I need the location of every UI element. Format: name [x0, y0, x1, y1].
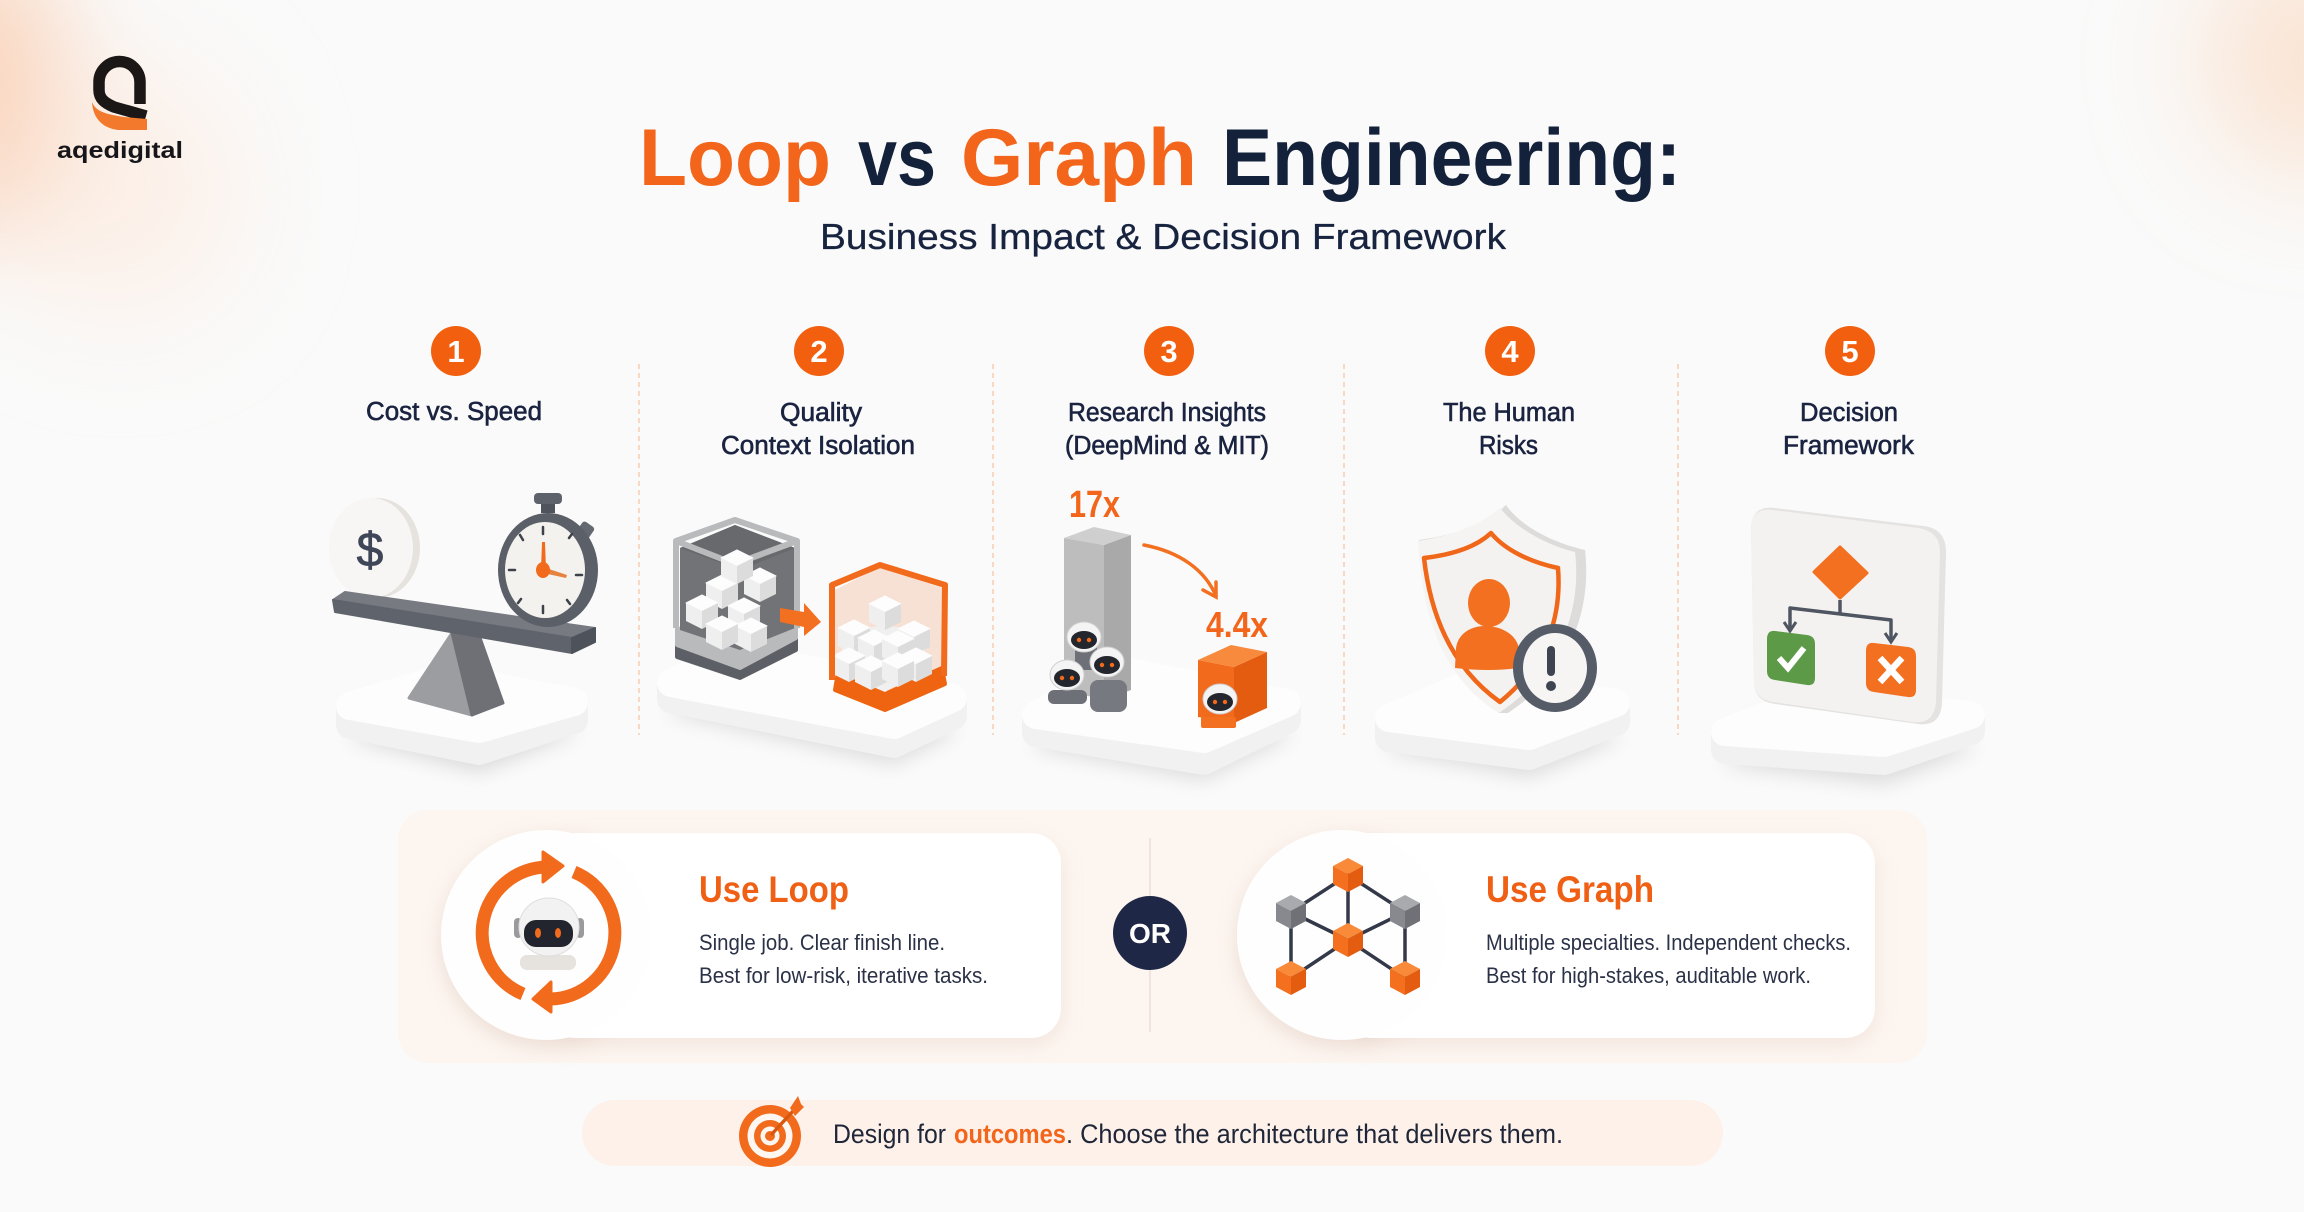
card: use loop: [441, 830, 1061, 1046]
text: loop details: Best for low-risk, iterative tasks.: [699, 963, 988, 988]
number badge 2: 2: [810, 334, 828, 369]
number badge 5: 5: [1841, 334, 1859, 369]
logo: [57, 61, 183, 163]
icon: decision flow panel: [1718, 508, 1980, 784]
curved arrow: [1144, 545, 1216, 597]
top-left corner glow: [0, 0, 240, 320]
title: [639, 113, 1681, 203]
card: use graph: [1237, 830, 1875, 1046]
icon: balance scale with coin and stopwatch: [329, 493, 598, 772]
text: graph details: Multiple specialties. Independent checks.: [1486, 930, 1851, 955]
closing statement: outcomes: [954, 1119, 1066, 1149]
column 5: decision framework: [1718, 326, 1980, 784]
heading: research insights: Research Insights: [1068, 399, 1266, 427]
icon: loop arrows with robot: [482, 852, 615, 1012]
heading: the human risks: Risks: [1479, 432, 1538, 460]
panel: loop or graph choice: [398, 810, 1927, 1063]
closing statement: . Choose the architecture that delivers them.: [1066, 1119, 1563, 1149]
column 1: cost vs speed: [329, 326, 598, 772]
text: graph details: [1486, 930, 1851, 988]
icon: target with arrow: [739, 1096, 804, 1167]
column 2: quality context isolation: [665, 326, 960, 764]
heading: quality context isolation: Quality: [780, 399, 862, 427]
number badge 2: [794, 326, 844, 376]
column 3: research insights: [1030, 326, 1295, 780]
heading: decision framework: [1783, 399, 1914, 460]
closing statement: Design for: [833, 1119, 946, 1149]
text: graph details: Best for high-stakes, auditable work.: [1486, 963, 1811, 988]
heading: the human risks: The Human: [1443, 399, 1575, 427]
icon: graph network: [1276, 858, 1420, 995]
number badge 1: 1: [447, 334, 465, 369]
top-right corner glow: [2200, 0, 2304, 180]
heading: decision framework: Framework: [1783, 432, 1914, 460]
arrow between boxes: [780, 603, 821, 636]
heading: use graph: Use Graph: [1486, 869, 1654, 910]
badge: or: [1113, 896, 1187, 970]
closing statement: [833, 1119, 1563, 1149]
title: vs: [858, 113, 936, 203]
label 4.4x: 4.4x: [1206, 604, 1268, 645]
heading: research insights: [1065, 399, 1269, 460]
badge: or: OR: [1129, 918, 1171, 949]
title: Engineering:: [1222, 113, 1681, 203]
icon: balance scale with coin and stopwatch: $: [357, 524, 383, 577]
heading: the human risks: [1443, 399, 1575, 460]
heading: research insights: (DeepMind & MIT): [1065, 432, 1269, 460]
icon: shield with person and alert: [1382, 505, 1624, 777]
heading: quality context isolation: Context Isolation: [721, 432, 915, 460]
heading: decision framework: Decision: [1800, 399, 1898, 427]
number badge 1: [431, 326, 481, 376]
title: Loop: [639, 113, 831, 203]
footer callout: [582, 1096, 1723, 1167]
heading: cost vs speed: Cost vs. Speed: [366, 398, 542, 426]
logo: aqedigital: [57, 137, 183, 163]
number badge 4: 4: [1501, 334, 1519, 369]
column 4: human risks: [1382, 326, 1624, 777]
number badge 3: 3: [1160, 334, 1178, 369]
text: loop details: [699, 930, 988, 988]
number badge 4: [1485, 326, 1535, 376]
subtitle: Business Impact & Decision Framework: [820, 216, 1507, 257]
heading: use loop: Use Loop: [699, 869, 849, 910]
title: Graph: [961, 113, 1197, 203]
icon: context boxes with cubes: [665, 520, 960, 764]
label 17x: 17x: [1069, 484, 1120, 526]
number badge 5: [1825, 326, 1875, 376]
text: loop details: Single job. Clear finish line.: [699, 930, 945, 955]
icon: 17x to 4.4x bars and robots: [1030, 484, 1295, 780]
number badge 3: [1144, 326, 1194, 376]
heading: quality context isolation: [721, 399, 915, 460]
